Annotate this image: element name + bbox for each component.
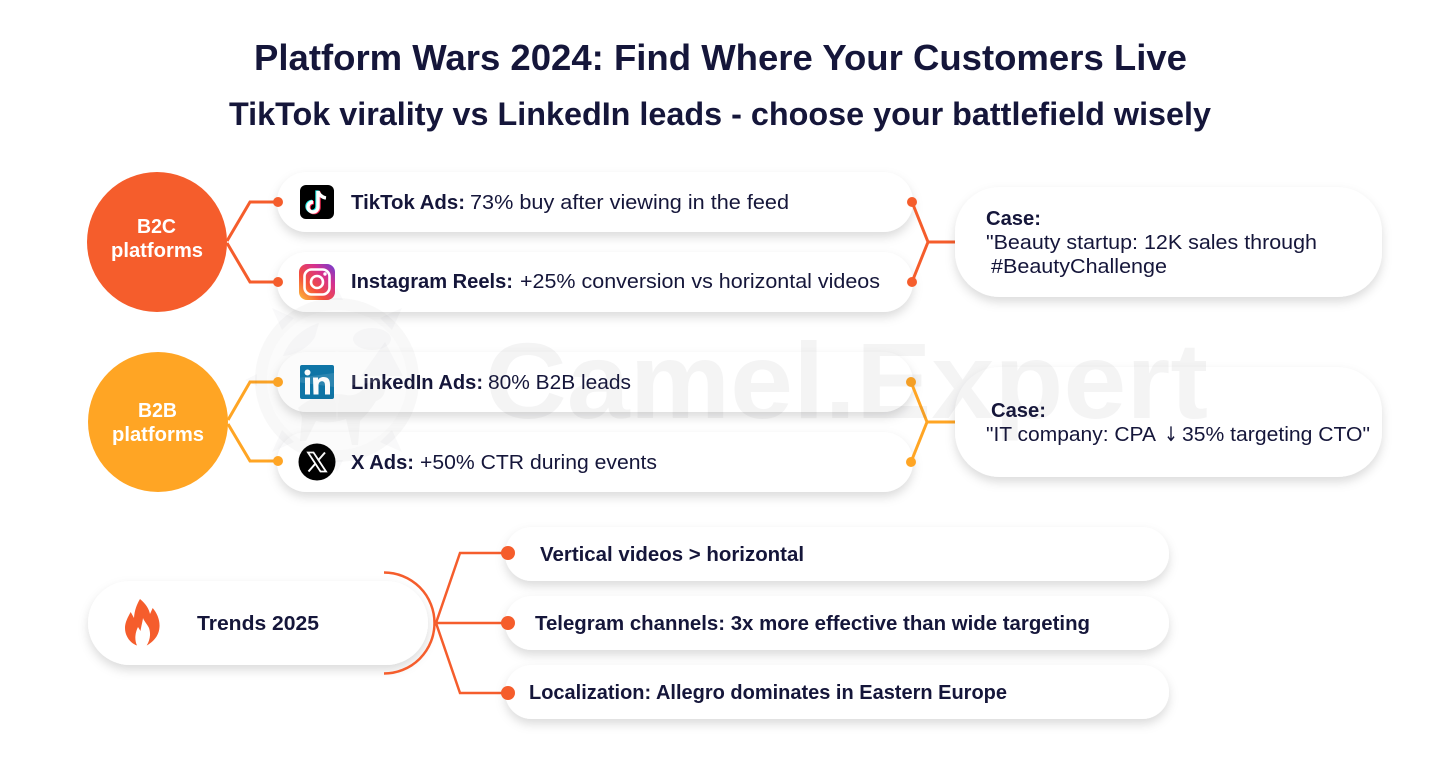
text: TikTok Ads [351,192,789,214]
trends connectors [436,553,507,693]
case text [986,208,1317,278]
B2B label: B2B [138,400,177,422]
trends label: Trends 2025 [197,613,319,635]
card: localization [505,665,1169,719]
B2C circle [87,172,227,312]
card: LinkedIn Ads [277,352,913,412]
panel: B2C platforms [87,172,913,312]
text: TikTok Ads: TikTok Ads: [351,192,465,214]
case text: "Beauty startup: 12K sales through [986,232,1317,254]
case text: "IT company: CPA [986,424,1157,446]
icon: Instagram [299,264,335,300]
watermark [245,288,1208,472]
text: X Ads: X Ads: [351,452,414,474]
text: X Ads: +50% CTR during events [420,452,657,474]
B2C label: platforms [111,240,203,262]
B2C label [111,216,203,262]
card: vertical videos [505,527,1169,581]
text: Instagram Reels: Instagram Reels: [351,271,513,293]
subtitle: TikTok virality vs LinkedIn leads - choose your battlefield wisely [229,96,1211,132]
text: Vertical videos > horizontal [540,544,804,566]
watermark text: Camel.Expert [485,320,1208,441]
text: TikTok Ads: 73% buy after viewing in the feed [470,192,789,214]
case text: Case: [991,400,1046,422]
trends arc [384,572,434,674]
B2C dots [273,197,283,287]
icon: LinkedIn [300,365,334,399]
card: Instagram Reels [277,252,913,312]
B2B label [112,400,204,446]
B2C label: B2C [137,216,176,238]
icon: flame [125,599,160,646]
B2B label: platforms [112,424,204,446]
icon: X [298,444,336,480]
B2C connectors left [227,202,278,282]
card: TikTok Ads [277,172,913,232]
text: Instagram Reels: +25% conversion vs horizontal videos [520,271,880,293]
case text: ↓ [1164,422,1178,446]
icon: TikTok [300,185,334,219]
B2B connectors left [228,382,278,461]
text: Telegram channels: 3x more effective than wide targeting [535,613,1090,635]
card: case IT company [955,367,1382,477]
case text: Case: [986,208,1041,230]
connector: B2B to case [906,377,955,467]
panel: B2B platforms [88,352,913,492]
text: LinkedIn Ads: 80% B2B leads [488,372,631,394]
text: Localization: Allegro dominates in Eastern Europe [529,682,1007,704]
B2B dots [273,377,283,466]
watermark emblem [245,288,429,472]
trends dots [501,546,515,700]
text: LinkedIn Ads [351,372,631,394]
card: case beauty startup [955,187,1382,297]
case text [986,400,1370,446]
card: telegram channels [505,596,1169,650]
trends card [88,581,428,665]
text: LinkedIn Ads: LinkedIn Ads: [351,372,483,394]
case text: 35% targeting CTO" [1182,424,1370,446]
card: X Ads [277,432,913,492]
connector: B2C to case [907,197,956,287]
title: Platform Wars 2024: Find Where Your Customers Live [254,37,1187,78]
text: Instagram Reels [351,271,880,293]
case text: #BeautyChallenge [991,256,1167,278]
B2B circle [88,352,228,492]
panel: Trends 2025 [88,553,507,693]
